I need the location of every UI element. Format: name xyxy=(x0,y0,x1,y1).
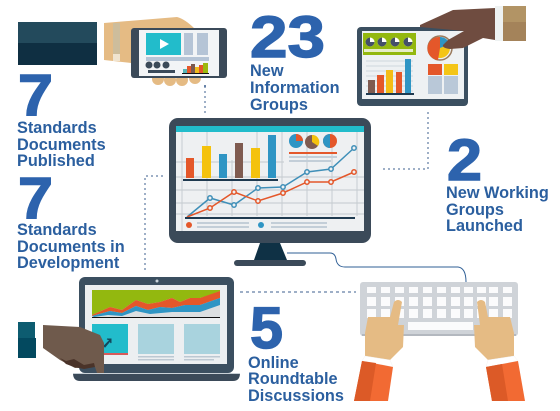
number: 7 in development: 7 xyxy=(18,166,53,231)
icon: tablet with hand xyxy=(357,6,526,106)
label: New Working Groups Launched: New Working xyxy=(446,184,549,202)
label: Online Roundtable Discussions: Roundtable xyxy=(248,370,338,388)
label: Online Roundtable Discussions: Online xyxy=(248,354,299,372)
label: Online Roundtable Discussions: Discussions xyxy=(248,387,344,405)
icon: hand holding phone xyxy=(18,17,227,86)
icon: keyboard with hands xyxy=(354,282,525,401)
label: New Information Groups: New xyxy=(250,62,284,80)
label: New Working Groups Launched: Launched xyxy=(446,217,523,235)
icon: desktop monitor with charts xyxy=(169,118,371,266)
number: 23: 23 xyxy=(250,5,325,70)
label: Standards Documents in Development: Documents in xyxy=(17,238,125,256)
connector: laptop to keyboard dotted arrow xyxy=(240,291,356,293)
label: Standards Documents in Development: Standards xyxy=(17,221,97,239)
connector: monitor to keyboard cable xyxy=(287,253,466,282)
label: Standards Documents Published: Standards xyxy=(17,119,97,137)
number: 5: 5 xyxy=(250,296,283,361)
icon: laptop with hand xyxy=(18,277,240,381)
label: Standards Documents in Development: Development xyxy=(17,254,120,272)
label: New Information Groups: Groups xyxy=(250,96,308,114)
connector: laptop to monitor dotted arrow xyxy=(145,176,163,270)
label: Standards Documents Published: Documents xyxy=(17,136,106,154)
number: 2: 2 xyxy=(447,128,482,193)
label: New Working Groups Launched: Groups xyxy=(446,201,504,219)
label: Standards Documents Published: Published xyxy=(17,152,95,170)
connector: tablet to monitor dotted arrow xyxy=(380,112,428,169)
connector: phone to monitor dotted arrow xyxy=(204,85,206,115)
number: 7 published: 7 xyxy=(18,63,53,128)
label: New Information Groups: Information xyxy=(250,79,340,97)
